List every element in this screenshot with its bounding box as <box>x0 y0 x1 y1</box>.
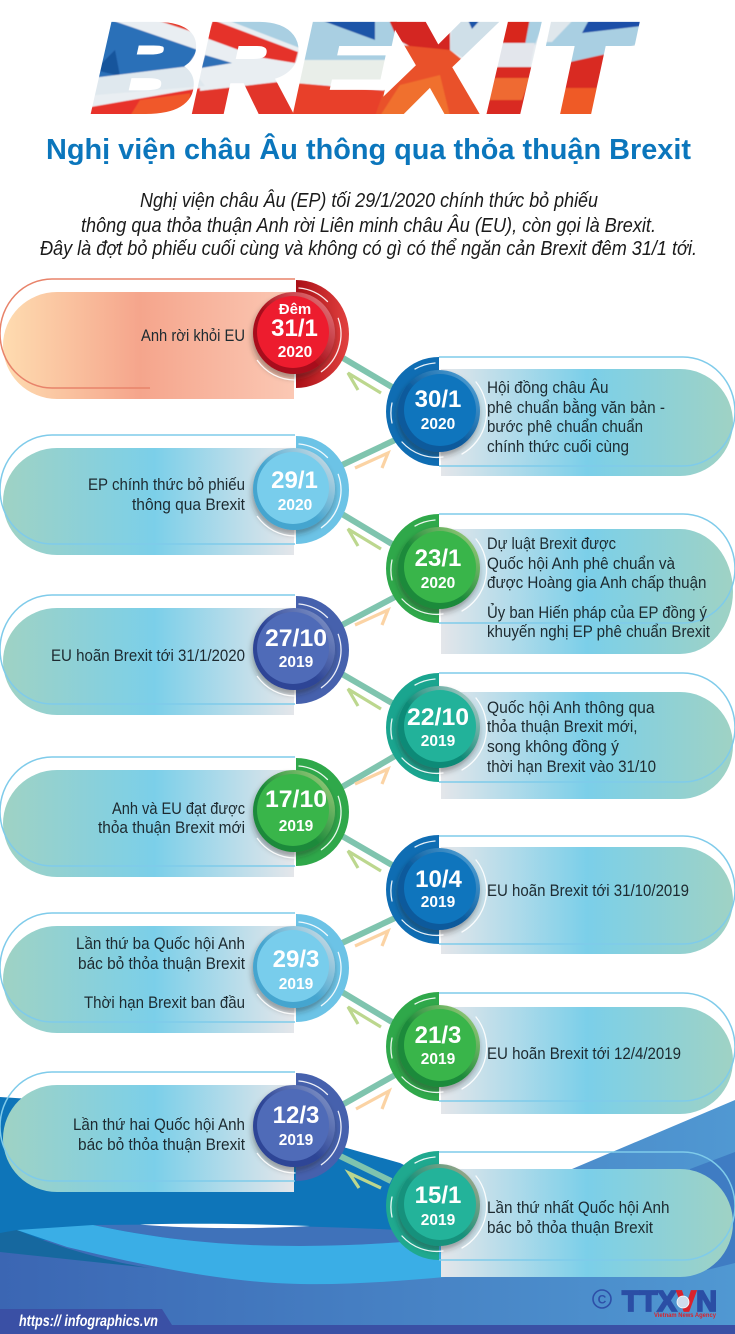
panel: 12/3 Lần thứ hai Quốc hội Anh: 12/3 <box>273 1102 319 1129</box>
panel: 22/10 Quốc hội Anh thông qua: thỏa thuận Brexit mới, <box>487 718 638 736</box>
TTXVN logo: TTXVN <box>622 1286 717 1318</box>
panel: 27/10 EU hoãn Brexit: 2019 <box>279 654 314 671</box>
panel: 12/3 Lần thứ hai Quốc hội Anh <box>0 1072 349 1192</box>
panel: 29/1 EP chính thức bỏ phiếu: 2020 <box>278 497 312 514</box>
title: Nghị viện châu Âu thông qua thỏa thuận Brexit <box>46 132 691 166</box>
intro paragraph <box>40 189 697 260</box>
panel: 12/3 Lần thứ hai Quốc hội Anh: Lần thứ hai Quốc hội Anh <box>73 1116 245 1134</box>
panel: 30/1 Hội đồng châu Âu: 30/1 <box>415 386 461 413</box>
panel: 21/3 EU hoãn Brexit: EU hoãn Brexit tới 12/4/2019 <box>487 1045 681 1063</box>
panel: 30/1 Hội đồng châu Âu: 2020 <box>421 416 455 433</box>
panel: 10/4 EU hoãn Brexit: EU hoãn Brexit tới 31/10/2019 <box>487 882 689 900</box>
panel: 15/1 Lần thứ nhất Quốc hội Anh: bác bỏ thỏa thuận Brexit <box>487 1219 653 1237</box>
panel: 22/10 Quốc hội Anh thông qua: Quốc hội Anh thông qua <box>487 699 655 717</box>
panel: 15/1 Lần thứ nhất Quốc hội Anh <box>386 1151 735 1277</box>
panel: 21/3 EU hoãn Brexit <box>386 992 735 1114</box>
panel: 10/4 EU hoãn Brexit <box>386 835 735 954</box>
panel: 30/1 Hội đồng châu Âu: chính thức cuối cùng <box>487 438 629 456</box>
panel: 27/10 EU hoãn Brexit: EU hoãn Brexit tới 31/1/2020 <box>51 647 245 665</box>
panel: 30/1 Hội đồng châu Âu: bước phê chuẩn chuẩn <box>487 418 643 436</box>
panel: 30/1 Hội đồng châu Âu <box>386 357 735 476</box>
panel: 15/1 Lần thứ nhất Quốc hội Anh: 2019 <box>421 1212 456 1229</box>
panel: 31/1 Anh rời khỏi EU: Đêm <box>279 301 311 318</box>
panel: 17/10 Anh và EU đạt được: 2019 <box>279 818 314 835</box>
panel: 27/10 EU hoãn Brexit: 27/10 <box>265 625 327 652</box>
panel: 27/10 EU hoãn Brexit <box>0 595 349 715</box>
background waves <box>0 1097 735 1334</box>
panel: 15/1 Lần thứ nhất Quốc hội Anh: 15/1 <box>415 1182 461 1209</box>
panel: 29/1 EP chính thức bỏ phiếu: 29/1 <box>271 467 318 494</box>
panel: 31/1 Anh rời khỏi EU: Anh rời khỏi EU <box>141 327 245 345</box>
panel: 22/10 Quốc hội Anh thông qua: thời hạn Brexit vào 31/10 <box>487 758 656 776</box>
panel: 15/1 Lần thứ nhất Quốc hội Anh: Lần thứ nhất Quốc hội Anh <box>487 1199 670 1217</box>
panel: 29/3 Lần thứ ba Quốc hội Anh: Lần thứ ba Quốc hội Anh <box>76 935 245 953</box>
TTXVN logo: C <box>598 1292 607 1306</box>
panel: 29/3 Lần thứ ba Quốc hội Anh: Thời hạn Brexit ban đầu <box>84 994 245 1012</box>
panel: 23/1 Dự luật Brexit được: được Hoàng gia Anh chấp thuận <box>487 574 706 592</box>
panel: 29/1 EP chính thức bỏ phiếu <box>0 435 349 555</box>
panel: 23/1 Dự luật Brexit được <box>386 514 735 654</box>
TTXVN logo: Vietnam News Agency <box>654 1312 716 1319</box>
panel: 22/10 Quốc hội Anh thông qua <box>386 673 735 799</box>
panel: 22/10 Quốc hội Anh thông qua: 22/10 <box>407 704 469 731</box>
footer url tab <box>0 1309 172 1330</box>
panel: 17/10 Anh và EU đạt được: 17/10 <box>265 786 327 813</box>
panel: 12/3 Lần thứ hai Quốc hội Anh: 2019 <box>279 1132 314 1149</box>
panel: 30/1 Hội đồng châu Âu: phê chuẩn bằng văn bản - <box>487 398 665 417</box>
panel: 29/3 Lần thứ ba Quốc hội Anh: bác bỏ thỏa thuận Brexit <box>78 955 245 973</box>
panel: 31/1 Anh rời khỏi EU: 31/1 <box>271 315 318 342</box>
panel: 31/1 Anh rời khỏi EU: 2020 <box>278 344 312 361</box>
panel: 23/1 Dự luật Brexit được: 23/1 <box>415 545 461 572</box>
panel: 22/10 Quốc hội Anh thông qua: 2019 <box>421 733 456 750</box>
panel: 23/1 Dự luật Brexit được: Dự luật Brexit được <box>487 535 616 553</box>
intro paragraph: Nghị viện châu Âu (EP) tối 29/1/2020 chính thức bỏ phiếu <box>140 189 598 212</box>
panel: 29/3 Lần thứ ba Quốc hội Anh: 29/3 <box>273 946 319 973</box>
panel: 30/1 Hội đồng châu Âu: Hội đồng châu Âu <box>487 378 608 397</box>
panel: 10/4 EU hoãn Brexit: 10/4 <box>415 866 463 893</box>
connector lines and arrows <box>340 358 395 1188</box>
panel: 29/1 EP chính thức bỏ phiếu: thông qua Brexit <box>132 496 245 514</box>
panel: 23/1 Dự luật Brexit được: 2020 <box>421 575 455 592</box>
BREXIT logo <box>90 22 640 114</box>
panel: 17/10 Anh và EU đạt được: thỏa thuận Brexit mới <box>98 819 245 837</box>
panel: 23/1 Dự luật Brexit được: khuyến nghị EP phê chuẩn Brexit <box>487 623 710 641</box>
panel: 22/10 Quốc hội Anh thông qua: song không đồng ý <box>487 738 620 756</box>
panel: 29/1 EP chính thức bỏ phiếu: EP chính thức bỏ phiếu <box>88 476 245 494</box>
panel: 31/1 Anh rời khỏi EU <box>0 279 349 399</box>
panel: 17/10 Anh và EU đạt được: Anh và EU đạt được <box>112 800 245 818</box>
panel: 10/4 EU hoãn Brexit: 2019 <box>421 894 456 911</box>
panel: 12/3 Lần thứ hai Quốc hội Anh: bác bỏ thỏa thuận Brexit <box>78 1136 245 1154</box>
panel: 29/3 Lần thứ ba Quốc hội Anh <box>0 913 349 1033</box>
panel: 21/3 EU hoãn Brexit: 2019 <box>421 1051 456 1068</box>
panel: 29/3 Lần thứ ba Quốc hội Anh: 2019 <box>279 976 314 993</box>
panel: 17/10 Anh và EU đạt được <box>0 757 349 877</box>
panel: 21/3 EU hoãn Brexit: 21/3 <box>415 1022 461 1049</box>
footer url tab: https:// infographics.vn <box>19 1313 158 1330</box>
intro paragraph: thông qua thỏa thuận Anh rời Liên minh châu Âu (EU), còn gọi là Brexit. <box>81 214 656 237</box>
panel: 23/1 Dự luật Brexit được: Ủy ban Hiến pháp của EP đồng ý <box>487 603 708 622</box>
panel: 23/1 Dự luật Brexit được: Quốc hội Anh phê chuẩn và <box>487 555 676 573</box>
